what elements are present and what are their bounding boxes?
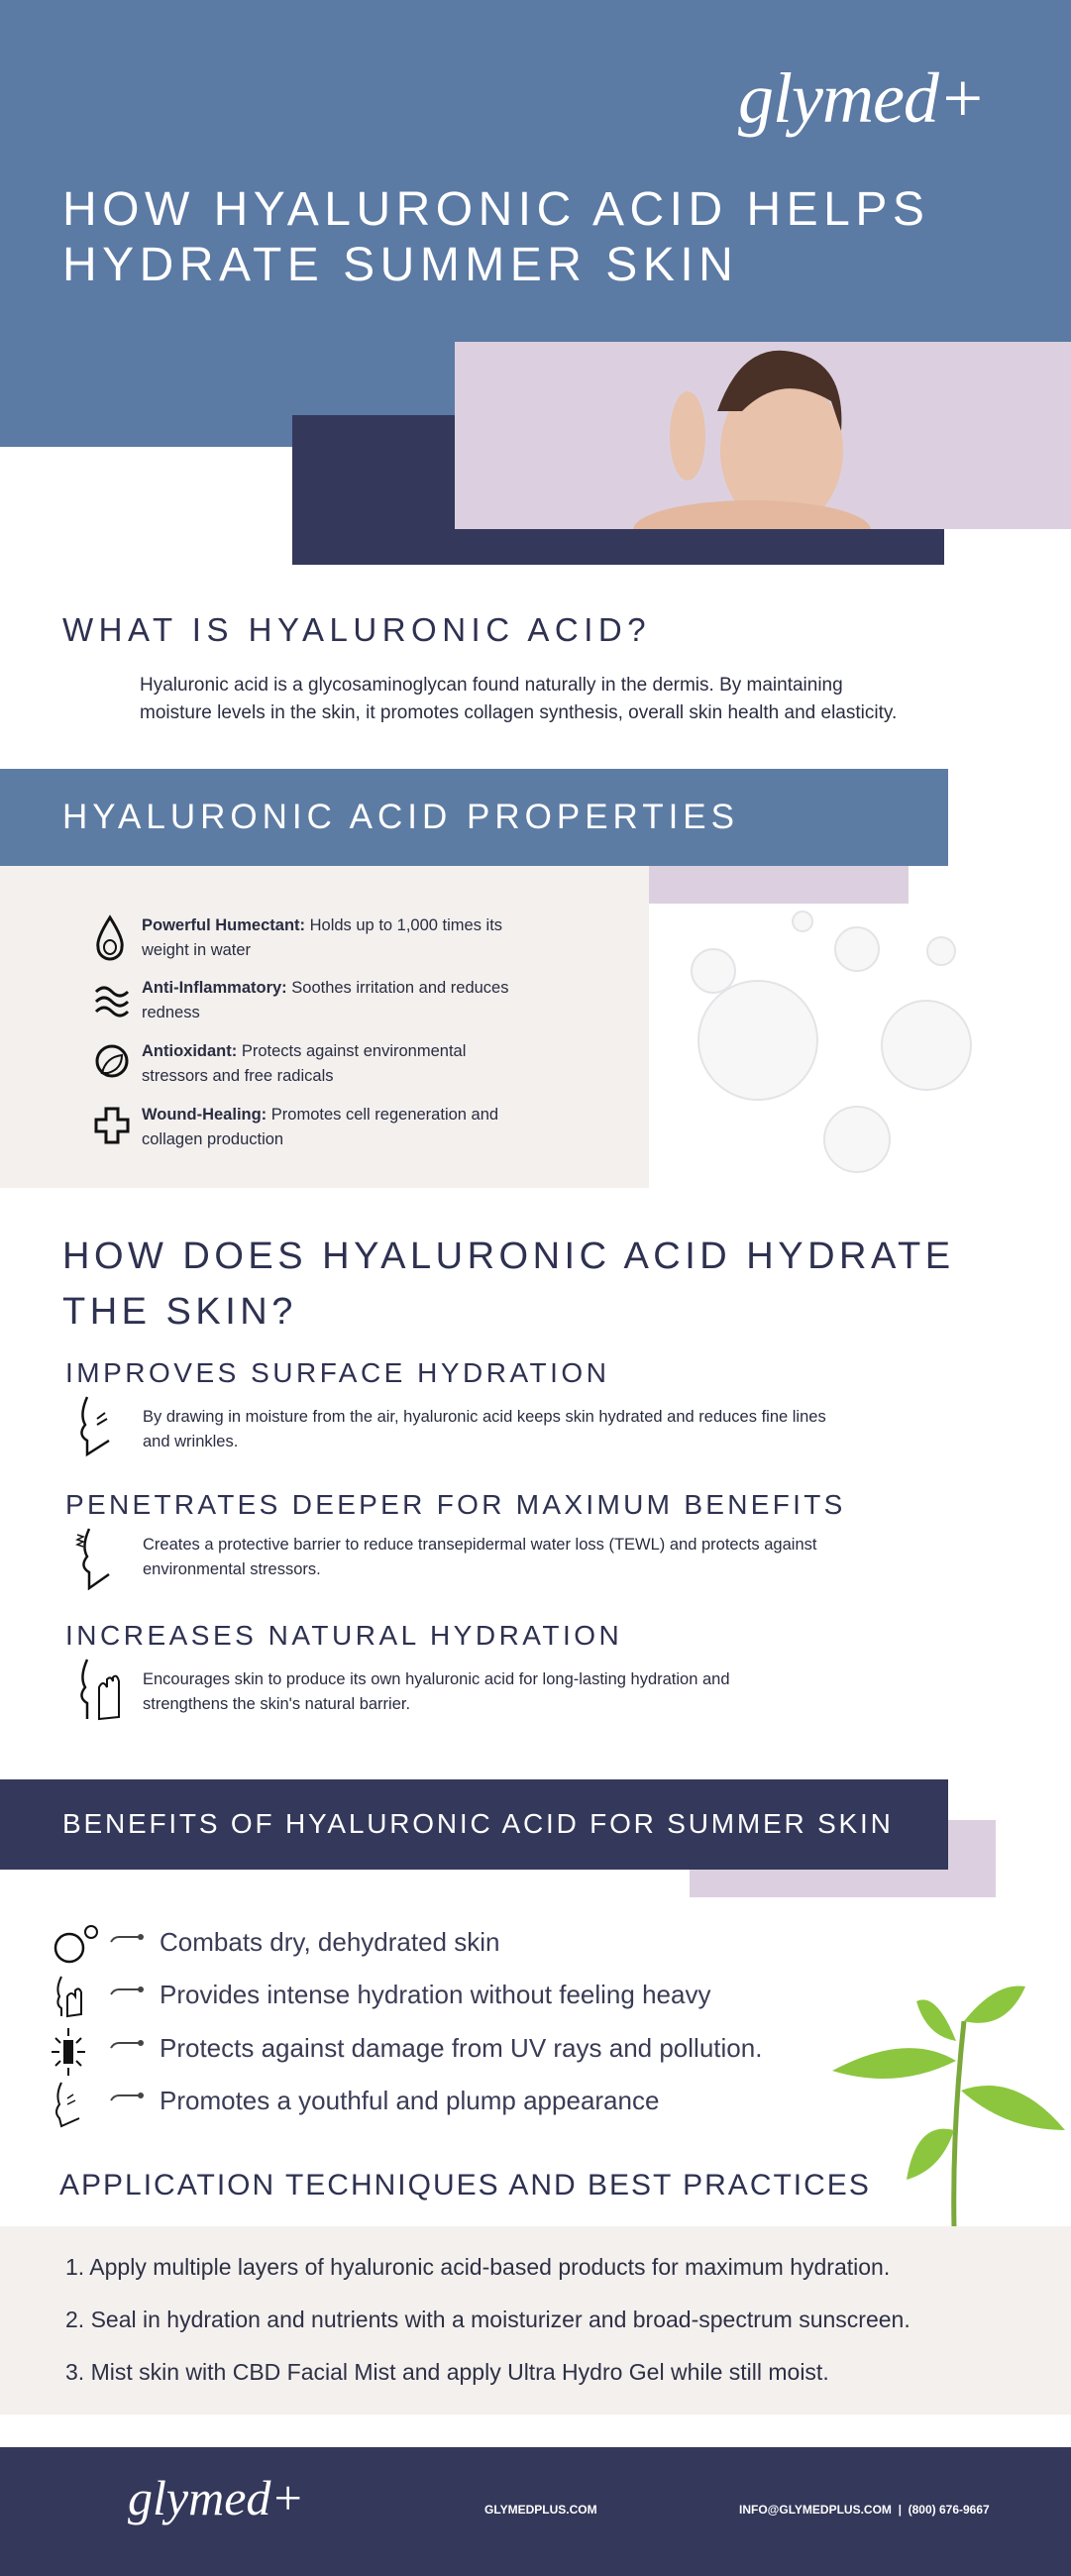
section: how does: HOW DOES HYALURONIC ACID HYDRATE [62,1235,955,1277]
item: humectant: Powerful Humectant: Holds up to 1,000 times its weight in water [142,916,502,959]
benefit 1: Combats dry, dehydrated skin [160,1927,499,1957]
application panel [0,2226,1071,2415]
header band [0,0,1071,447]
benefit 4: Promotes a youthful and plump appearance [160,2086,659,2115]
lavender accent 2 [690,1820,996,1897]
subsection: surface [65,1357,826,1456]
step 2: 2. Seal in hydration and nutrients with a moisturizer and broad-spectrum sunscreen. [65,2307,910,2332]
item: antioxidant: Antioxidant: Protects against environmental stressors and free radicals [142,1042,466,1085]
footer logo: glymed+ [128,2470,304,2525]
icon: face stress [75,1528,110,1590]
step 3: 3. Mist skin with CBD Facial Mist and apply Ultra Hydro Gel while still moist. [65,2359,829,2385]
section: what is: WHAT IS HYALURONIC ACID? [62,611,651,648]
section: how does [62,1235,955,1333]
benefit 3 [52,2028,762,2076]
photo panel [455,342,1071,529]
properties panel [0,866,649,1188]
title: HYDRATE SUMMER SKIN [62,239,738,291]
properties header bar: HYALURONIC ACID PROPERTIES [62,798,739,836]
benefits header bar [0,1779,948,1870]
plant illustration [832,1986,1065,2226]
benefit 3: Protects against damage from UV rays and pollution. [160,2033,762,2063]
subsection: deeper: PENETRATES DEEPER FOR MAXIMUM BENEFITS [65,1489,846,1520]
subsection: deeper [65,1489,846,1590]
bubbles [691,911,972,1173]
section: how does: THE SKIN? [62,1291,297,1333]
benefit 4 [55,2083,659,2128]
step 1: 1. Apply multiple layers of hyaluronic acid-based products for maximum hydration. [65,2254,890,2280]
benefit 1 [54,1925,499,1964]
subsection: natural: Encourages skin to produce its own hyaluronic acid for long-lasting hydration and strengthens the skin's natural barrier. [143,1670,730,1713]
benefit 2: Provides intense hydration without feeling heavy [160,1980,710,2009]
logo: glymed+ [738,58,985,138]
title [62,183,929,291]
title: HOW HYALURONIC ACID HELPS [62,183,929,236]
benefit 2 [56,1976,711,2017]
benefits list [52,1925,762,2128]
paragraph: what is: Hyaluronic acid is a glycosaminoglycan found naturally in the dermis. By maintaining moisture levels in the skin, it promotes collagen synthesis, overall skin health and elasticity. [140,675,897,723]
footer [0,2447,1071,2576]
benefits header bar: BENEFITS OF HYALURONIC ACID FOR SUMMER SKIN [62,1808,894,1839]
subsection: natural [65,1620,730,1720]
properties header bar [0,769,948,866]
navy block [292,415,944,565]
icon: face [80,1397,110,1456]
subsection: surface: By drawing in moisture from the air, hyaluronic acid keeps skin hydrated and reduces fine lines and wrinkles. [143,1408,826,1450]
item: wound healing: Wound-Healing: Promotes cell regeneration and collagen production [142,1106,498,1148]
subsection: deeper: Creates a protective barrier to reduce transepidermal water loss (TEWL) and protects against environmental stressors. [143,1536,816,1578]
subsection: natural: INCREASES NATURAL HYDRATION [65,1620,622,1651]
subsection: surface: IMPROVES SURFACE HYDRATION [65,1357,609,1388]
website: GLYMEDPLUS.COM [484,2503,597,2517]
icon: face hand [80,1659,120,1720]
section: application: APPLICATION TECHNIQUES AND BEST PRACTICES [59,2169,871,2201]
item: anti-inflammatory: Anti-Inflammatory: Soothes irritation and reduces redness [142,979,508,1021]
lavender accent [649,866,909,904]
contact: INFO@GLYMEDPLUS.COM | (800) 676-9667 [739,2503,990,2517]
